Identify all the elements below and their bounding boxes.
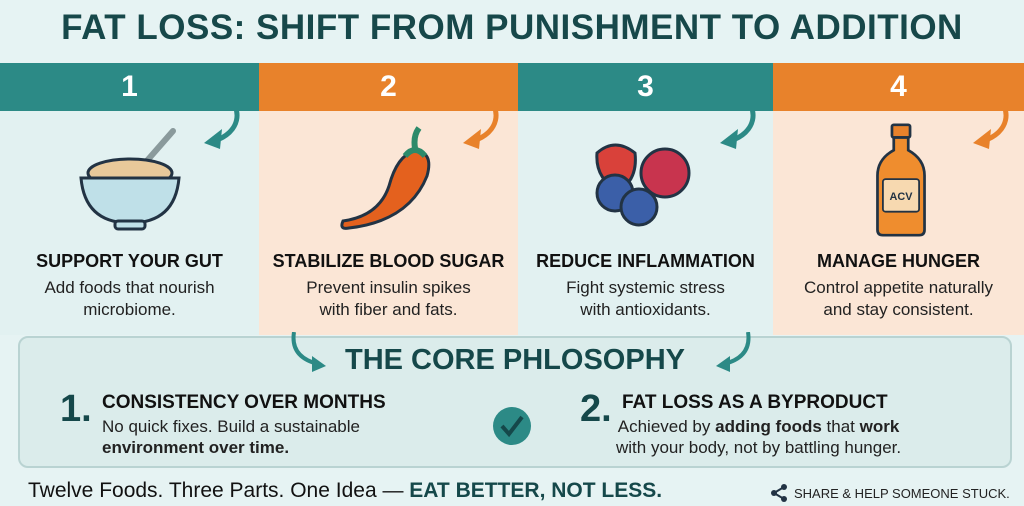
arrow 3 bbox=[720, 111, 756, 149]
panel: manage hunger: MANAGE HUNGER bbox=[817, 251, 980, 271]
title: FAT LOSS: SHIFT FROM PUNISHMENT TO ADDITION bbox=[61, 8, 963, 47]
icon: ACV bottle bbox=[876, 124, 926, 236]
point 2: with your body, not by battling hunger. bbox=[616, 438, 901, 457]
heading: THE CORE PHLOSOPHY bbox=[345, 344, 685, 376]
panel: support your gut: SUPPORT YOUR GUT bbox=[36, 251, 223, 271]
panel: manage hunger: and stay consistent. bbox=[823, 300, 974, 319]
point 2 bbox=[580, 388, 901, 457]
point 2: FAT LOSS AS A BYPRODUCT bbox=[622, 392, 888, 413]
icon: check bbox=[493, 407, 531, 445]
arrow 4 bbox=[973, 111, 1009, 149]
arrows into heading bbox=[292, 332, 326, 372]
panel: manage hunger: Control appetite naturally bbox=[804, 278, 993, 297]
panel: support your gut: microbiome. bbox=[83, 300, 176, 319]
point 1: 1. bbox=[60, 388, 92, 430]
point 1 bbox=[60, 388, 386, 457]
icon: chili pepper bbox=[340, 126, 430, 230]
icon: oat bowl bbox=[79, 128, 181, 230]
panel: support your gut bbox=[0, 63, 259, 335]
point 1: environment over time. bbox=[102, 438, 289, 457]
panel: reduce inflammation: with antioxidants. bbox=[580, 300, 711, 319]
panel: reduce inflammation: 3 bbox=[637, 70, 654, 103]
arrow 1 bbox=[204, 111, 240, 149]
panel: manage hunger: 4 bbox=[890, 70, 907, 103]
point 2: Achieved by adding foods that work bbox=[618, 417, 899, 436]
panel: stabilize blood sugar bbox=[259, 63, 518, 335]
panel: reduce inflammation: Fight systemic stress bbox=[566, 278, 725, 297]
panel: reduce inflammation bbox=[518, 63, 773, 335]
panel: reduce inflammation: REDUCE INFLAMMATION bbox=[536, 251, 755, 271]
panel: manage hunger bbox=[773, 63, 1024, 335]
arrow 2 bbox=[463, 111, 499, 149]
footer tagline: Twelve Foods. Three Parts. One Idea — EAT BETTER, NOT LESS. bbox=[28, 479, 662, 502]
panel: core philosophy bbox=[18, 336, 1012, 468]
icon: berries bbox=[595, 144, 690, 226]
panel: support your gut: Add foods that nourish bbox=[44, 278, 215, 297]
share callout: SHARE & HELP SOMEONE STUCK. bbox=[794, 486, 1010, 500]
panel: stabilize blood sugar: 2 bbox=[380, 70, 397, 103]
panel: support your gut: 1 bbox=[121, 70, 138, 103]
panel: stabilize blood sugar: STABILIZE BLOOD SUGAR bbox=[273, 251, 504, 271]
panel: stabilize blood sugar: Prevent insulin spikes bbox=[306, 278, 471, 297]
point 1: No quick fixes. Build a sustainable bbox=[102, 417, 360, 436]
point 2: 2. bbox=[580, 388, 612, 430]
panel: stabilize blood sugar: with fiber and fats. bbox=[320, 300, 457, 319]
point 1: CONSISTENCY OVER MONTHS bbox=[102, 392, 386, 413]
icon: ACV bottle: ACV bbox=[890, 191, 913, 203]
